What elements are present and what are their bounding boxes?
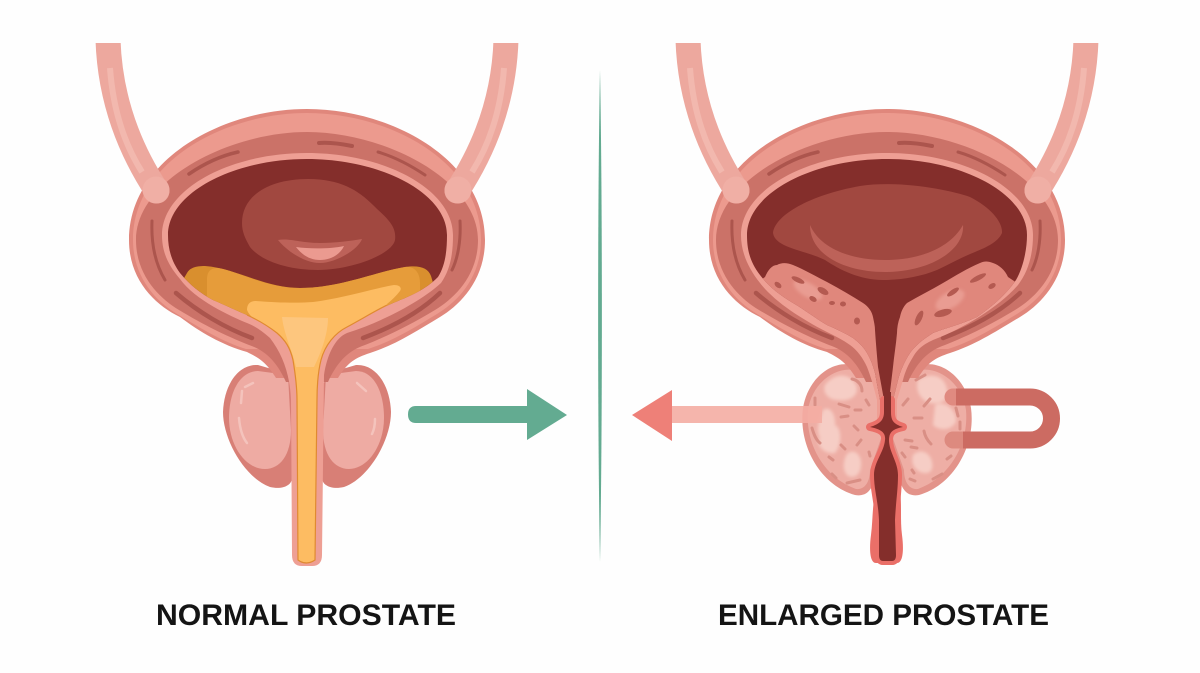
bladder wall <box>709 109 1065 382</box>
constricted urethra <box>870 392 903 563</box>
arrow: green pointing to divider <box>408 389 567 440</box>
urine in bladder <box>184 266 433 562</box>
urethra wall <box>162 153 453 566</box>
loop tube <box>944 388 1052 448</box>
left and right ureters <box>670 20 1110 204</box>
panel: enlarged prostate <box>670 20 1110 563</box>
bladder neck wall <box>741 153 1033 425</box>
label: enlarged prostate: ENLARGED PROSTATE <box>718 599 1049 632</box>
median lobes <box>763 262 1015 400</box>
arrow: pink pointing to divider <box>632 390 822 441</box>
bladder cavity <box>747 159 1027 420</box>
bladder wall <box>129 109 485 382</box>
gland: enlarged prostate lobes <box>802 364 972 495</box>
left and right ureters <box>90 20 530 204</box>
label: normal prostate: NORMAL PROSTATE <box>156 599 456 632</box>
gland: normal prostate lobes <box>223 365 391 488</box>
urethra outline <box>247 305 387 563</box>
panel: normal prostate <box>90 20 530 570</box>
inner bladder tissue <box>773 184 1002 280</box>
inner bladder tissue <box>242 179 395 270</box>
bladder cavity <box>168 159 447 562</box>
divider line <box>598 70 602 562</box>
